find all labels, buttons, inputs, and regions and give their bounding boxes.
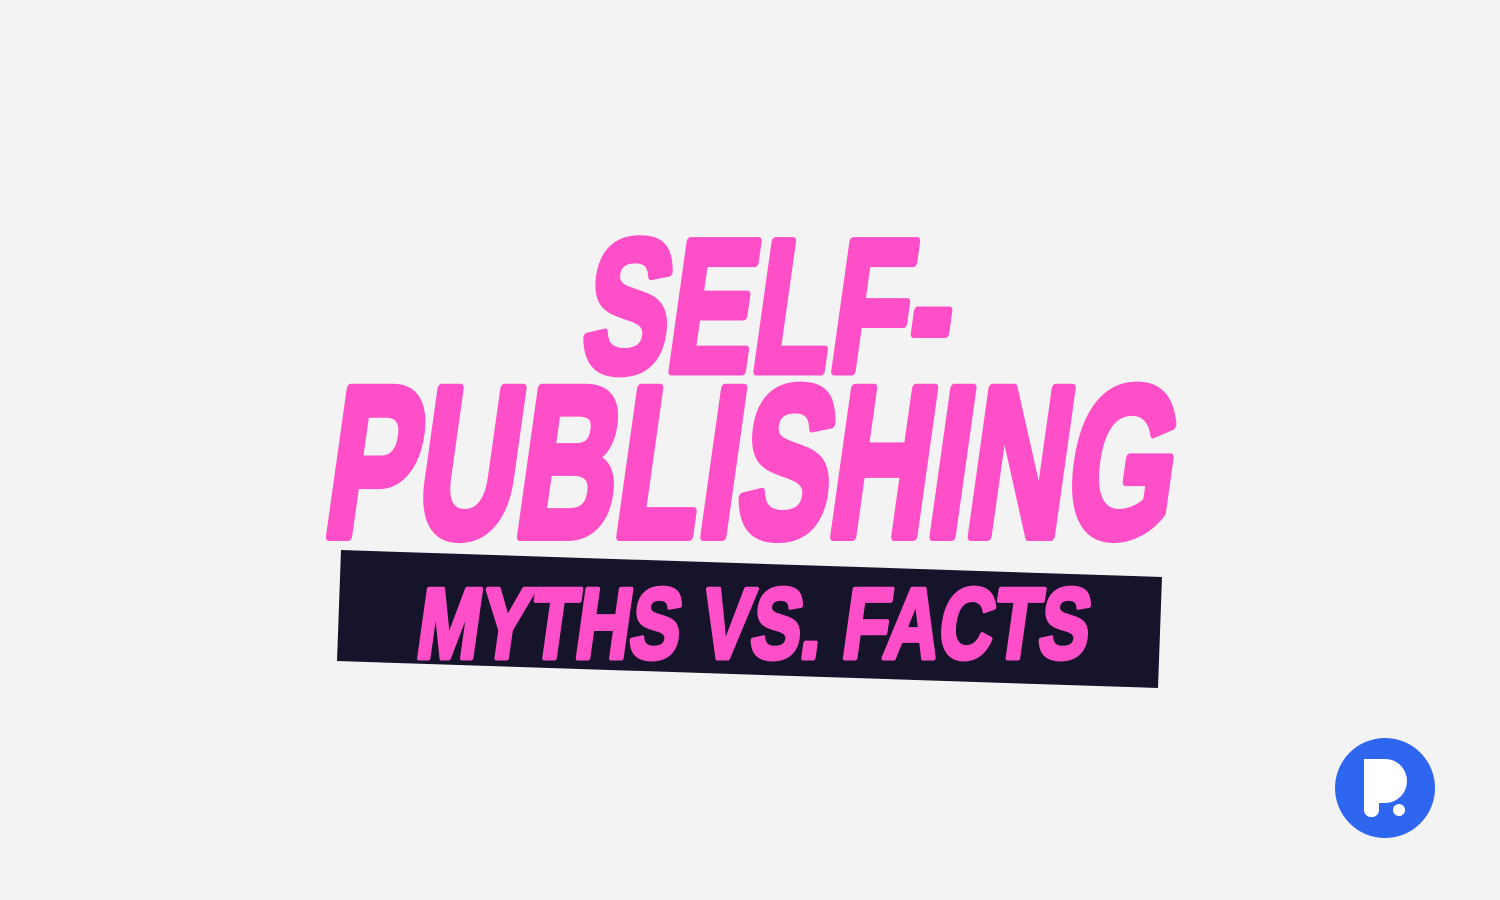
subtitle text: MYTHS VS. FACTS	[411, 568, 1099, 680]
title line: SELF-: SELF-	[572, 202, 970, 412]
title	[314, 202, 1195, 582]
subtitle banner	[337, 550, 1162, 688]
icon: logo	[1335, 738, 1435, 838]
